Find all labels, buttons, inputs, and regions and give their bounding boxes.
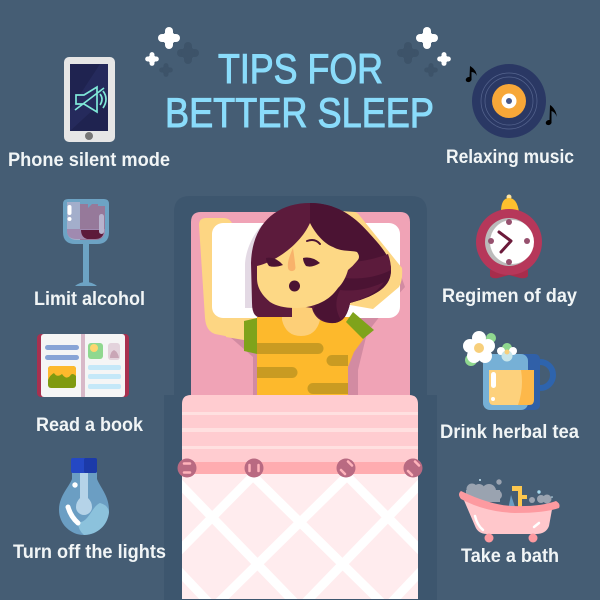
left sleeve (244, 318, 257, 354)
tip: relaxing music (446, 64, 574, 168)
mattress (191, 212, 410, 400)
sparkles left (145, 27, 199, 77)
label: Phone silent mode (8, 150, 170, 171)
label: Read a book (36, 415, 143, 436)
label: Relaxing music (446, 147, 574, 168)
left arm (199, 218, 256, 342)
icon: book (37, 334, 129, 397)
label: Take a bath (461, 546, 559, 567)
tip: phone silent mode (8, 57, 170, 171)
eyebrow (307, 240, 320, 244)
arm below pillow (226, 318, 256, 342)
tip: turn off the lights (13, 458, 166, 563)
shirt (244, 312, 374, 396)
icon: alarm clock (476, 194, 542, 278)
shirt stripes (257, 343, 348, 394)
buttons (178, 458, 422, 478)
icon: light bulb (59, 458, 109, 535)
label: Regimen of day (442, 286, 577, 307)
right sleeve (346, 312, 374, 339)
icon: tea mug (463, 331, 553, 410)
hair lock lower (336, 282, 384, 320)
tip: limit alcohol (34, 199, 145, 310)
label: Drink herbal tea (440, 422, 579, 443)
neck (282, 305, 322, 336)
icon: bathtub (459, 479, 560, 542)
icon: wine glass (63, 199, 109, 286)
title: line two: BETTER SLEEP (165, 89, 434, 136)
sheet (182, 474, 418, 599)
sheet lattice (170, 476, 430, 600)
bed frame (164, 196, 437, 600)
bed with sleeping woman (164, 196, 437, 600)
pillow shadow (245, 225, 262, 308)
body shadow (230, 273, 405, 396)
right raised arm (330, 211, 402, 309)
eye left (266, 258, 283, 267)
tip: read a book (36, 334, 143, 436)
title block (165, 45, 434, 136)
mouth (289, 280, 300, 292)
icon: phone (64, 57, 115, 142)
blanket (182, 395, 418, 474)
tip: take a bath (459, 479, 560, 567)
tip: regimen of day (442, 194, 577, 307)
face (257, 223, 359, 308)
hair (251, 203, 391, 323)
label: Turn off the lights (13, 542, 166, 563)
title: line one: TIPS FOR (218, 45, 383, 92)
pillow (212, 223, 400, 318)
eye right (303, 258, 320, 267)
blanket band (182, 462, 418, 474)
tip: drink herbal tea (440, 331, 579, 443)
icon: music note right (546, 105, 557, 125)
hair dark right side (310, 203, 391, 323)
blanket stripes (182, 412, 418, 449)
sparkles right (397, 27, 451, 77)
nose (288, 248, 296, 271)
hair locks (345, 254, 391, 279)
label: Limit alcohol (34, 289, 145, 310)
icon: music note left (466, 66, 477, 82)
icon: vinyl record (472, 64, 546, 138)
